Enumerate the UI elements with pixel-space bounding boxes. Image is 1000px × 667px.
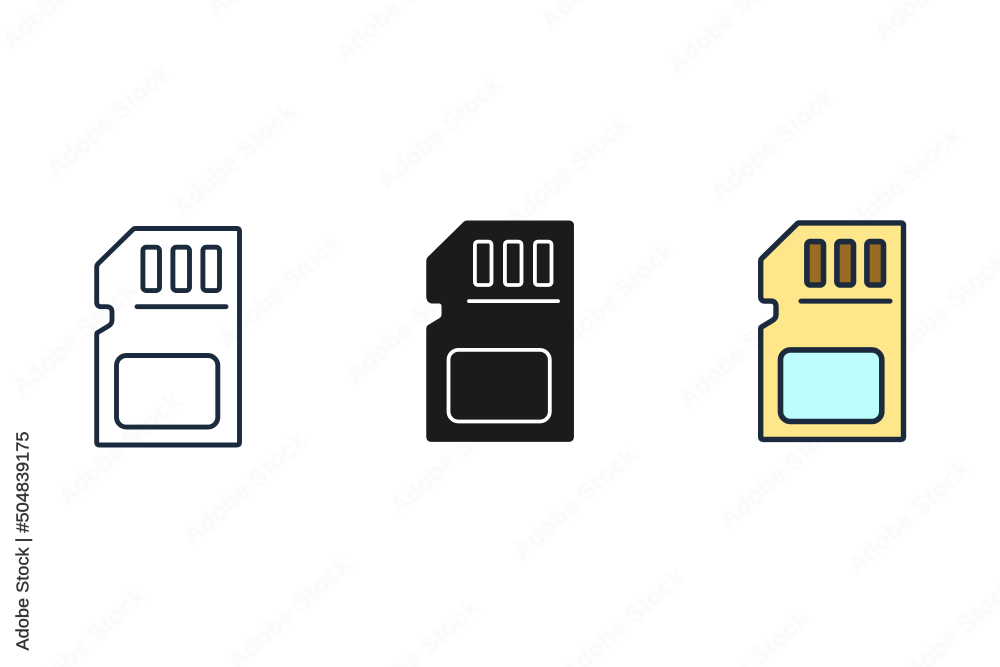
watermark pattern: Adobe Stock <box>52 386 188 512</box>
watermark pattern: Adobe Stock <box>178 425 314 551</box>
watermark pattern: Adobe Stock <box>372 70 508 196</box>
icon: solid black SD card <box>429 223 572 439</box>
watermark pattern: Adobe Stock <box>705 82 841 208</box>
watermark pattern: Adobe Stock <box>673 288 809 414</box>
watermark pattern: Adobe Stock <box>714 409 850 535</box>
watermark pattern: Adobe Stock <box>212 228 348 354</box>
icon: coloured SD card <box>761 223 904 439</box>
icon: outline SD card <box>97 228 240 445</box>
watermark pattern: Adobe Stock <box>41 58 177 184</box>
watermark pattern: Adobe Stock <box>832 121 968 247</box>
watermark pattern: Adobe Stock <box>841 454 977 580</box>
watermark pattern: Adobe Stock <box>507 440 643 566</box>
watermark pattern: Adobe Stock <box>167 97 303 223</box>
watermark pattern: Adobe Stock <box>545 236 681 362</box>
watermark pattern: Adobe Stock <box>340 264 476 390</box>
watermark pattern: Adobe Stock <box>7 276 143 402</box>
watermark pattern: Adobe Stock <box>500 109 636 235</box>
watermark pattern: Adobe Stock <box>384 396 520 522</box>
stock id label: Adobe Stock | #504839175 <box>12 432 32 650</box>
